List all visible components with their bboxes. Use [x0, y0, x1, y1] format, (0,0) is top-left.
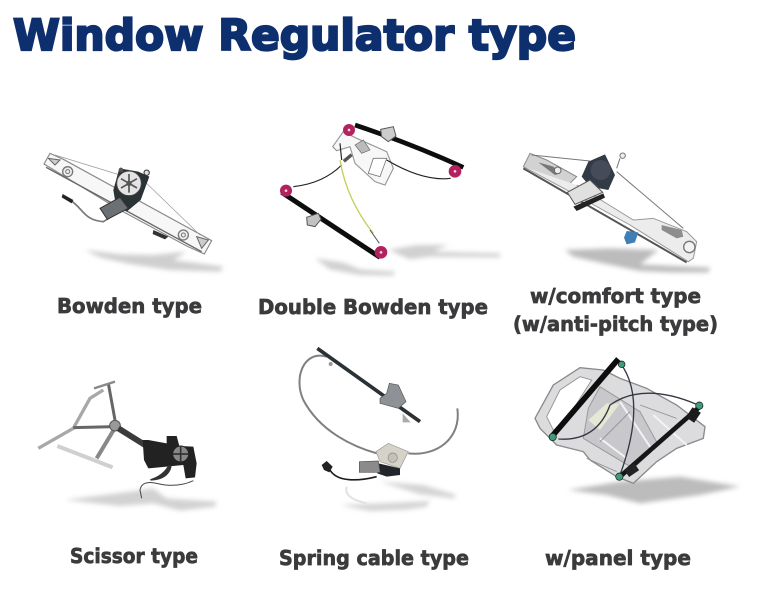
title: Window Regulator type [13, 11, 576, 61]
shadow [315, 245, 500, 276]
label: w/comfort type (w/anti-pitch type): w/comfort type [530, 284, 701, 308]
guide cable [299, 356, 377, 453]
motor [582, 154, 615, 190]
scissor arms [38, 390, 103, 448]
carriers [381, 127, 396, 142]
motor body [113, 168, 149, 212]
carrier bracket [380, 383, 406, 408]
shadow [565, 248, 710, 272]
rail [317, 348, 420, 422]
image: panel type regulator [535, 359, 740, 503]
panel [535, 368, 705, 483]
image: comfort type regulator [523, 153, 710, 272]
label: Spring cable type: Spring cable type [279, 546, 469, 570]
image: Bowden type regulator [44, 153, 223, 272]
motor [143, 436, 197, 478]
label: Double Bowden type: Double Bowden type [258, 295, 488, 319]
label: Scissor type: Scissor type [70, 544, 198, 568]
cables [532, 155, 683, 228]
rails [552, 359, 618, 437]
motor [376, 443, 408, 468]
shadow [568, 477, 740, 503]
blue clip [624, 231, 638, 244]
image: Spring cable type regulator [299, 348, 458, 511]
shadow [85, 250, 223, 272]
cables [293, 143, 451, 187]
shadow [65, 488, 217, 511]
plate [333, 132, 393, 185]
green pulleys [549, 361, 703, 480]
label: w/panel type: w/panel type [545, 546, 691, 570]
wire and connector [330, 470, 377, 480]
rail [523, 153, 577, 187]
shadow [340, 482, 457, 511]
pulleys [280, 124, 461, 259]
wire [70, 200, 117, 222]
label: w/comfort type (w/anti-pitch type): (w/anti-pitch type) [513, 312, 718, 336]
label: w/comfort type (w/anti-pitch type) [513, 284, 718, 336]
image: Double Bowden type regulator [280, 124, 500, 276]
rails [355, 125, 463, 167]
cables [620, 365, 634, 475]
rail [44, 153, 212, 254]
label: Bowden type: Bowden type [57, 294, 202, 318]
image: Scissor type regulator [38, 382, 217, 511]
